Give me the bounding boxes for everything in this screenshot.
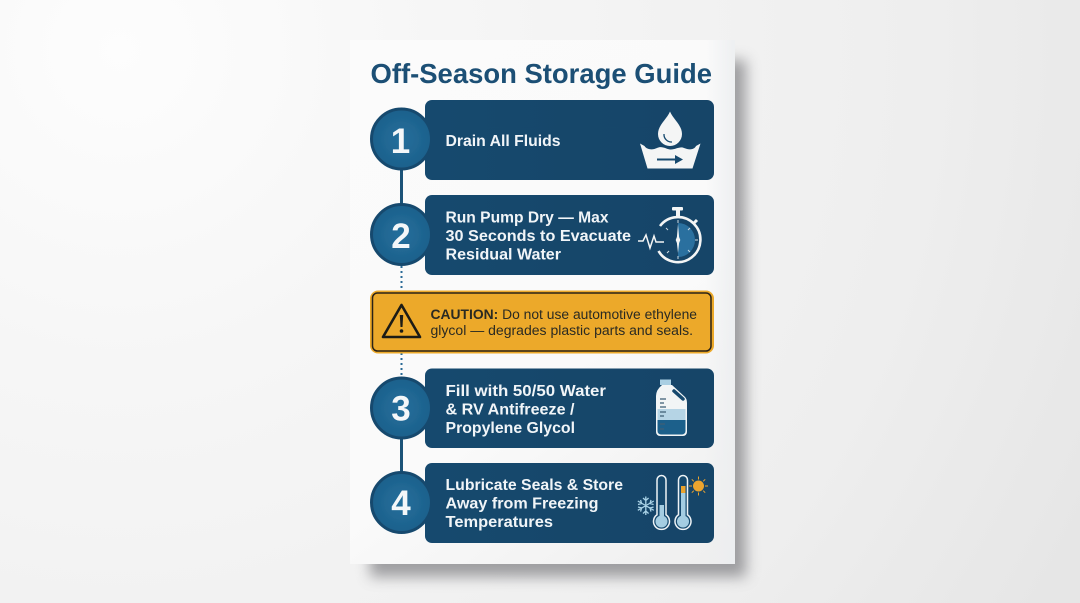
title: Off-Season Storage Guide xyxy=(370,58,712,89)
icon: warm thermometer with sun xyxy=(675,476,708,529)
step 3 label: Fill with 50/50 Water xyxy=(446,383,606,400)
step 2 panel xyxy=(425,195,714,275)
step 2 badge xyxy=(372,204,432,264)
step 4 label: Lubricate Seals & Store xyxy=(446,477,623,494)
step 2 label: Run Pump Dry — Max xyxy=(446,210,609,226)
step 3 label xyxy=(446,383,606,437)
icon: cold thermometer with snowflake xyxy=(638,476,670,529)
caution text: CAUTION: Do not use automotive ethylene xyxy=(430,307,697,322)
icon: stopwatch with pulse xyxy=(638,207,700,262)
connector: step 2 to caution xyxy=(400,266,402,292)
step 3 badge: 3 xyxy=(391,390,411,428)
step 4 label xyxy=(446,477,623,531)
step 1 badge: 1 xyxy=(391,122,410,161)
step 2 label xyxy=(446,210,631,264)
step 4 badge xyxy=(372,472,432,532)
step 1 panel xyxy=(425,100,714,180)
connector: step 3 to 4 xyxy=(400,435,403,478)
icon: water drop over basin xyxy=(640,112,700,168)
icon: antifreeze jug xyxy=(656,380,687,436)
panel: caution banner xyxy=(370,290,714,354)
step 3 label: Propylene Glycol xyxy=(446,420,575,437)
step 4 xyxy=(372,463,714,543)
step 2 xyxy=(372,195,714,275)
step 2 label: 30 Seconds to Evacuate xyxy=(446,228,631,245)
card shadow xyxy=(370,60,746,577)
step 3 label: & RV Antifreeze / xyxy=(446,402,575,418)
step 2 label: Residual Water xyxy=(446,246,561,264)
step 1 xyxy=(372,100,714,180)
step 2 badge: 2 xyxy=(391,217,411,256)
step 4 label: Temperatures xyxy=(446,514,553,531)
step 4 label: Away from Freezing xyxy=(446,496,598,512)
panel: guide card xyxy=(350,40,735,564)
step 3 xyxy=(372,368,714,448)
caution text: glycol — degrades plastic parts and seals. xyxy=(430,323,693,338)
icon: warning triangle xyxy=(383,305,420,337)
step 1 label: Drain All Fluids xyxy=(446,133,561,150)
step 3 badge xyxy=(372,378,432,438)
step 1 badge xyxy=(372,109,432,169)
step 3 panel xyxy=(425,368,714,448)
step 4 badge: 4 xyxy=(391,484,411,523)
connector: caution to step 3 xyxy=(400,353,402,378)
connector: step 1 to 2 xyxy=(400,165,403,210)
step 4 panel xyxy=(425,463,714,543)
caution text xyxy=(430,307,697,338)
